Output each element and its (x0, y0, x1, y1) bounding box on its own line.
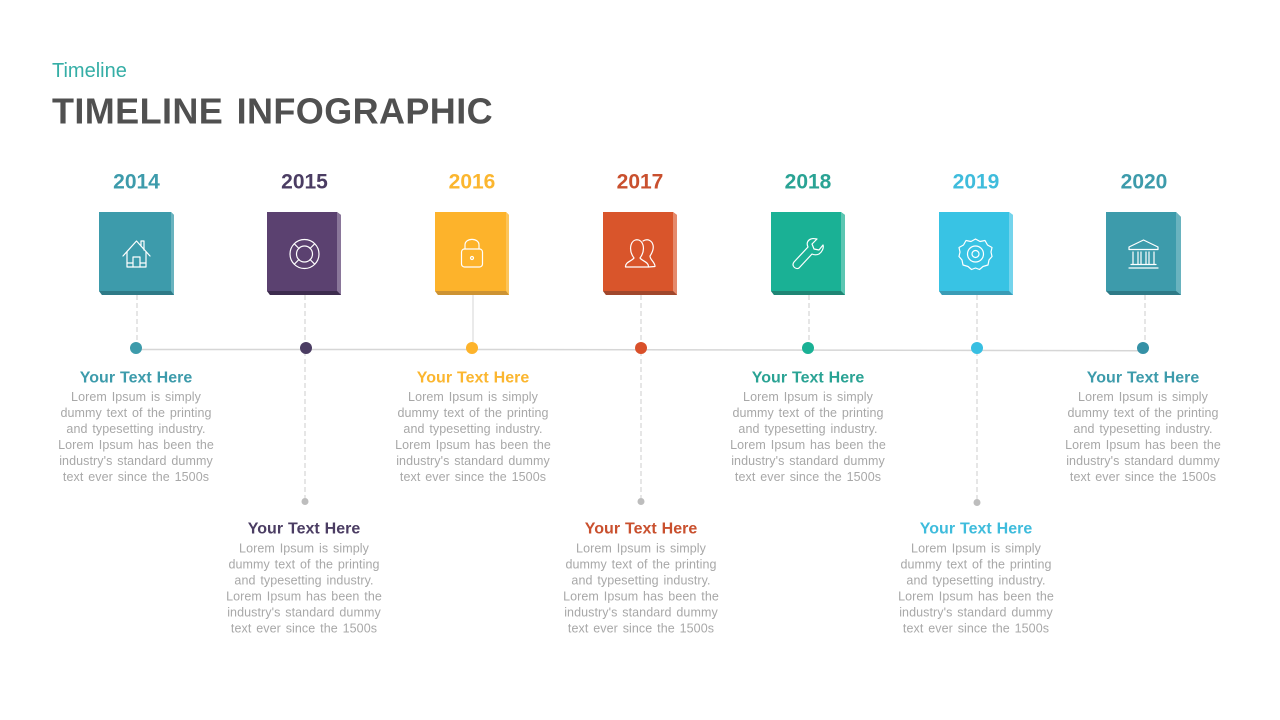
connector 2020 (1144, 295, 1146, 342)
text block 2015: industry's standard dummy (227, 606, 381, 620)
text block 2020 (1065, 370, 1221, 484)
text block 2019: and typesetting industry. (906, 574, 1046, 588)
text block 2017: Lorem Ipsum is simply (576, 542, 707, 556)
text block 2020: dummy text of the printing (1067, 406, 1219, 420)
title: TIMELINE INFOGRAPHIC (52, 90, 493, 132)
text block 2014: and typesetting industry. (66, 422, 206, 436)
text block 2018: industry's standard dummy (731, 454, 885, 468)
icon: bank (1129, 240, 1158, 268)
end dot 2019 (974, 499, 980, 506)
text block 2015: text ever since the 1500s (231, 622, 377, 636)
milestone 2020 (1065, 170, 1221, 484)
text block 2015: Lorem Ipsum is simply (239, 542, 370, 556)
text block 2020: Lorem Ipsum has been the (1065, 438, 1221, 452)
icon: padlock (462, 239, 482, 267)
text block 2019: industry's standard dummy (899, 606, 1053, 620)
text block 2018: and typesetting industry. (738, 422, 878, 436)
text block 2020: Your Text Here (1087, 370, 1199, 386)
text block 2017: text ever since the 1500s (568, 622, 714, 636)
box 2016 (435, 212, 509, 295)
connector 2017 (640, 295, 642, 498)
text block 2019: dummy text of the printing (900, 558, 1052, 572)
year 2019: 2019 (953, 170, 999, 194)
connector 2014 (136, 295, 138, 342)
milestone 2018 (730, 170, 886, 484)
milestone 2019 (898, 170, 1054, 636)
year 2020: 2020 (1121, 170, 1167, 194)
timeline axis (136, 350, 1143, 351)
text block 2015: and typesetting industry. (234, 574, 374, 588)
text block 2016: Lorem Ipsum has been the (395, 438, 551, 452)
text block 2014: industry's standard dummy (59, 454, 213, 468)
box 2014 (99, 212, 174, 295)
text block 2014: text ever since the 1500s (63, 470, 209, 484)
text block 2015: Lorem Ipsum has been the (226, 590, 382, 604)
text block 2016: Your Text Here (417, 370, 529, 386)
box 2017 (603, 212, 677, 295)
text block 2019: Your Text Here (920, 520, 1032, 538)
node 2014 (130, 342, 142, 354)
icon: gear (959, 239, 992, 270)
text block 2014 (58, 370, 214, 484)
text block 2018: dummy text of the printing (732, 406, 884, 420)
milestone 2016 (395, 170, 551, 484)
icon: house (123, 241, 150, 267)
node 2018 (802, 342, 814, 354)
text block 2016 (395, 370, 551, 484)
connector 2015 (304, 295, 306, 498)
connector 2019 (976, 295, 978, 499)
text block 2015 (226, 520, 382, 636)
milestone 2017 (563, 170, 719, 636)
text block 2016: Lorem Ipsum is simply (408, 390, 539, 404)
subtitle: Timeline (52, 60, 127, 82)
node 2015 (300, 342, 312, 354)
text block 2020: and typesetting industry. (1073, 422, 1213, 436)
text block 2014: Lorem Ipsum is simply (71, 390, 202, 404)
connector 2018 (808, 295, 810, 342)
text block 2019: Lorem Ipsum has been the (898, 590, 1054, 604)
node 2019 (971, 342, 983, 354)
icon: wrench (793, 239, 823, 269)
box 2015 (267, 212, 341, 295)
text block 2020: Lorem Ipsum is simply (1078, 390, 1209, 404)
node 2020 (1137, 342, 1149, 354)
end dot 2017 (638, 498, 644, 505)
icon: lifebuoy (290, 240, 319, 268)
text block 2016: dummy text of the printing (397, 406, 549, 420)
milestone 2014 (58, 170, 214, 484)
text block 2019: Lorem Ipsum is simply (911, 542, 1042, 556)
text block 2019 (898, 520, 1054, 636)
node 2016 (466, 342, 478, 354)
text block 2018: text ever since the 1500s (735, 470, 881, 484)
text block 2017: dummy text of the printing (565, 558, 717, 572)
text block 2017: Lorem Ipsum has been the (563, 590, 719, 604)
text block 2016: text ever since the 1500s (400, 470, 546, 484)
text block 2020: industry's standard dummy (1066, 454, 1220, 468)
text block 2018: Lorem Ipsum has been the (730, 438, 886, 452)
text block 2019: text ever since the 1500s (903, 622, 1049, 636)
icon: people (625, 240, 655, 267)
end dot 2015 (302, 498, 308, 505)
text block 2020: text ever since the 1500s (1070, 470, 1216, 484)
text block 2017 (563, 520, 719, 636)
milestone 2015 (226, 170, 382, 636)
year 2014: 2014 (113, 170, 160, 194)
box 2019 (939, 212, 1013, 295)
text block 2016: and typesetting industry. (403, 422, 543, 436)
year 2015: 2015 (281, 170, 328, 194)
box 2020 (1106, 212, 1181, 295)
text block 2014: dummy text of the printing (60, 406, 212, 420)
box 2018 (771, 212, 845, 295)
text block 2016: industry's standard dummy (396, 454, 550, 468)
year 2016: 2016 (449, 170, 495, 194)
text block 2017: and typesetting industry. (571, 574, 711, 588)
text block 2014: Your Text Here (80, 370, 192, 386)
text block 2017: Your Text Here (585, 520, 697, 538)
text block 2018 (730, 370, 886, 484)
text block 2017: industry's standard dummy (564, 606, 718, 620)
text block 2015: Your Text Here (248, 520, 360, 538)
text block 2018: Your Text Here (752, 370, 864, 386)
text block 2018: Lorem Ipsum is simply (743, 390, 874, 404)
year 2018: 2018 (785, 170, 832, 194)
text block 2014: Lorem Ipsum has been the (58, 438, 214, 452)
connector 2016 (472, 295, 474, 342)
text block 2015: dummy text of the printing (228, 558, 380, 572)
node 2017 (635, 342, 647, 354)
year 2017: 2017 (617, 170, 663, 194)
